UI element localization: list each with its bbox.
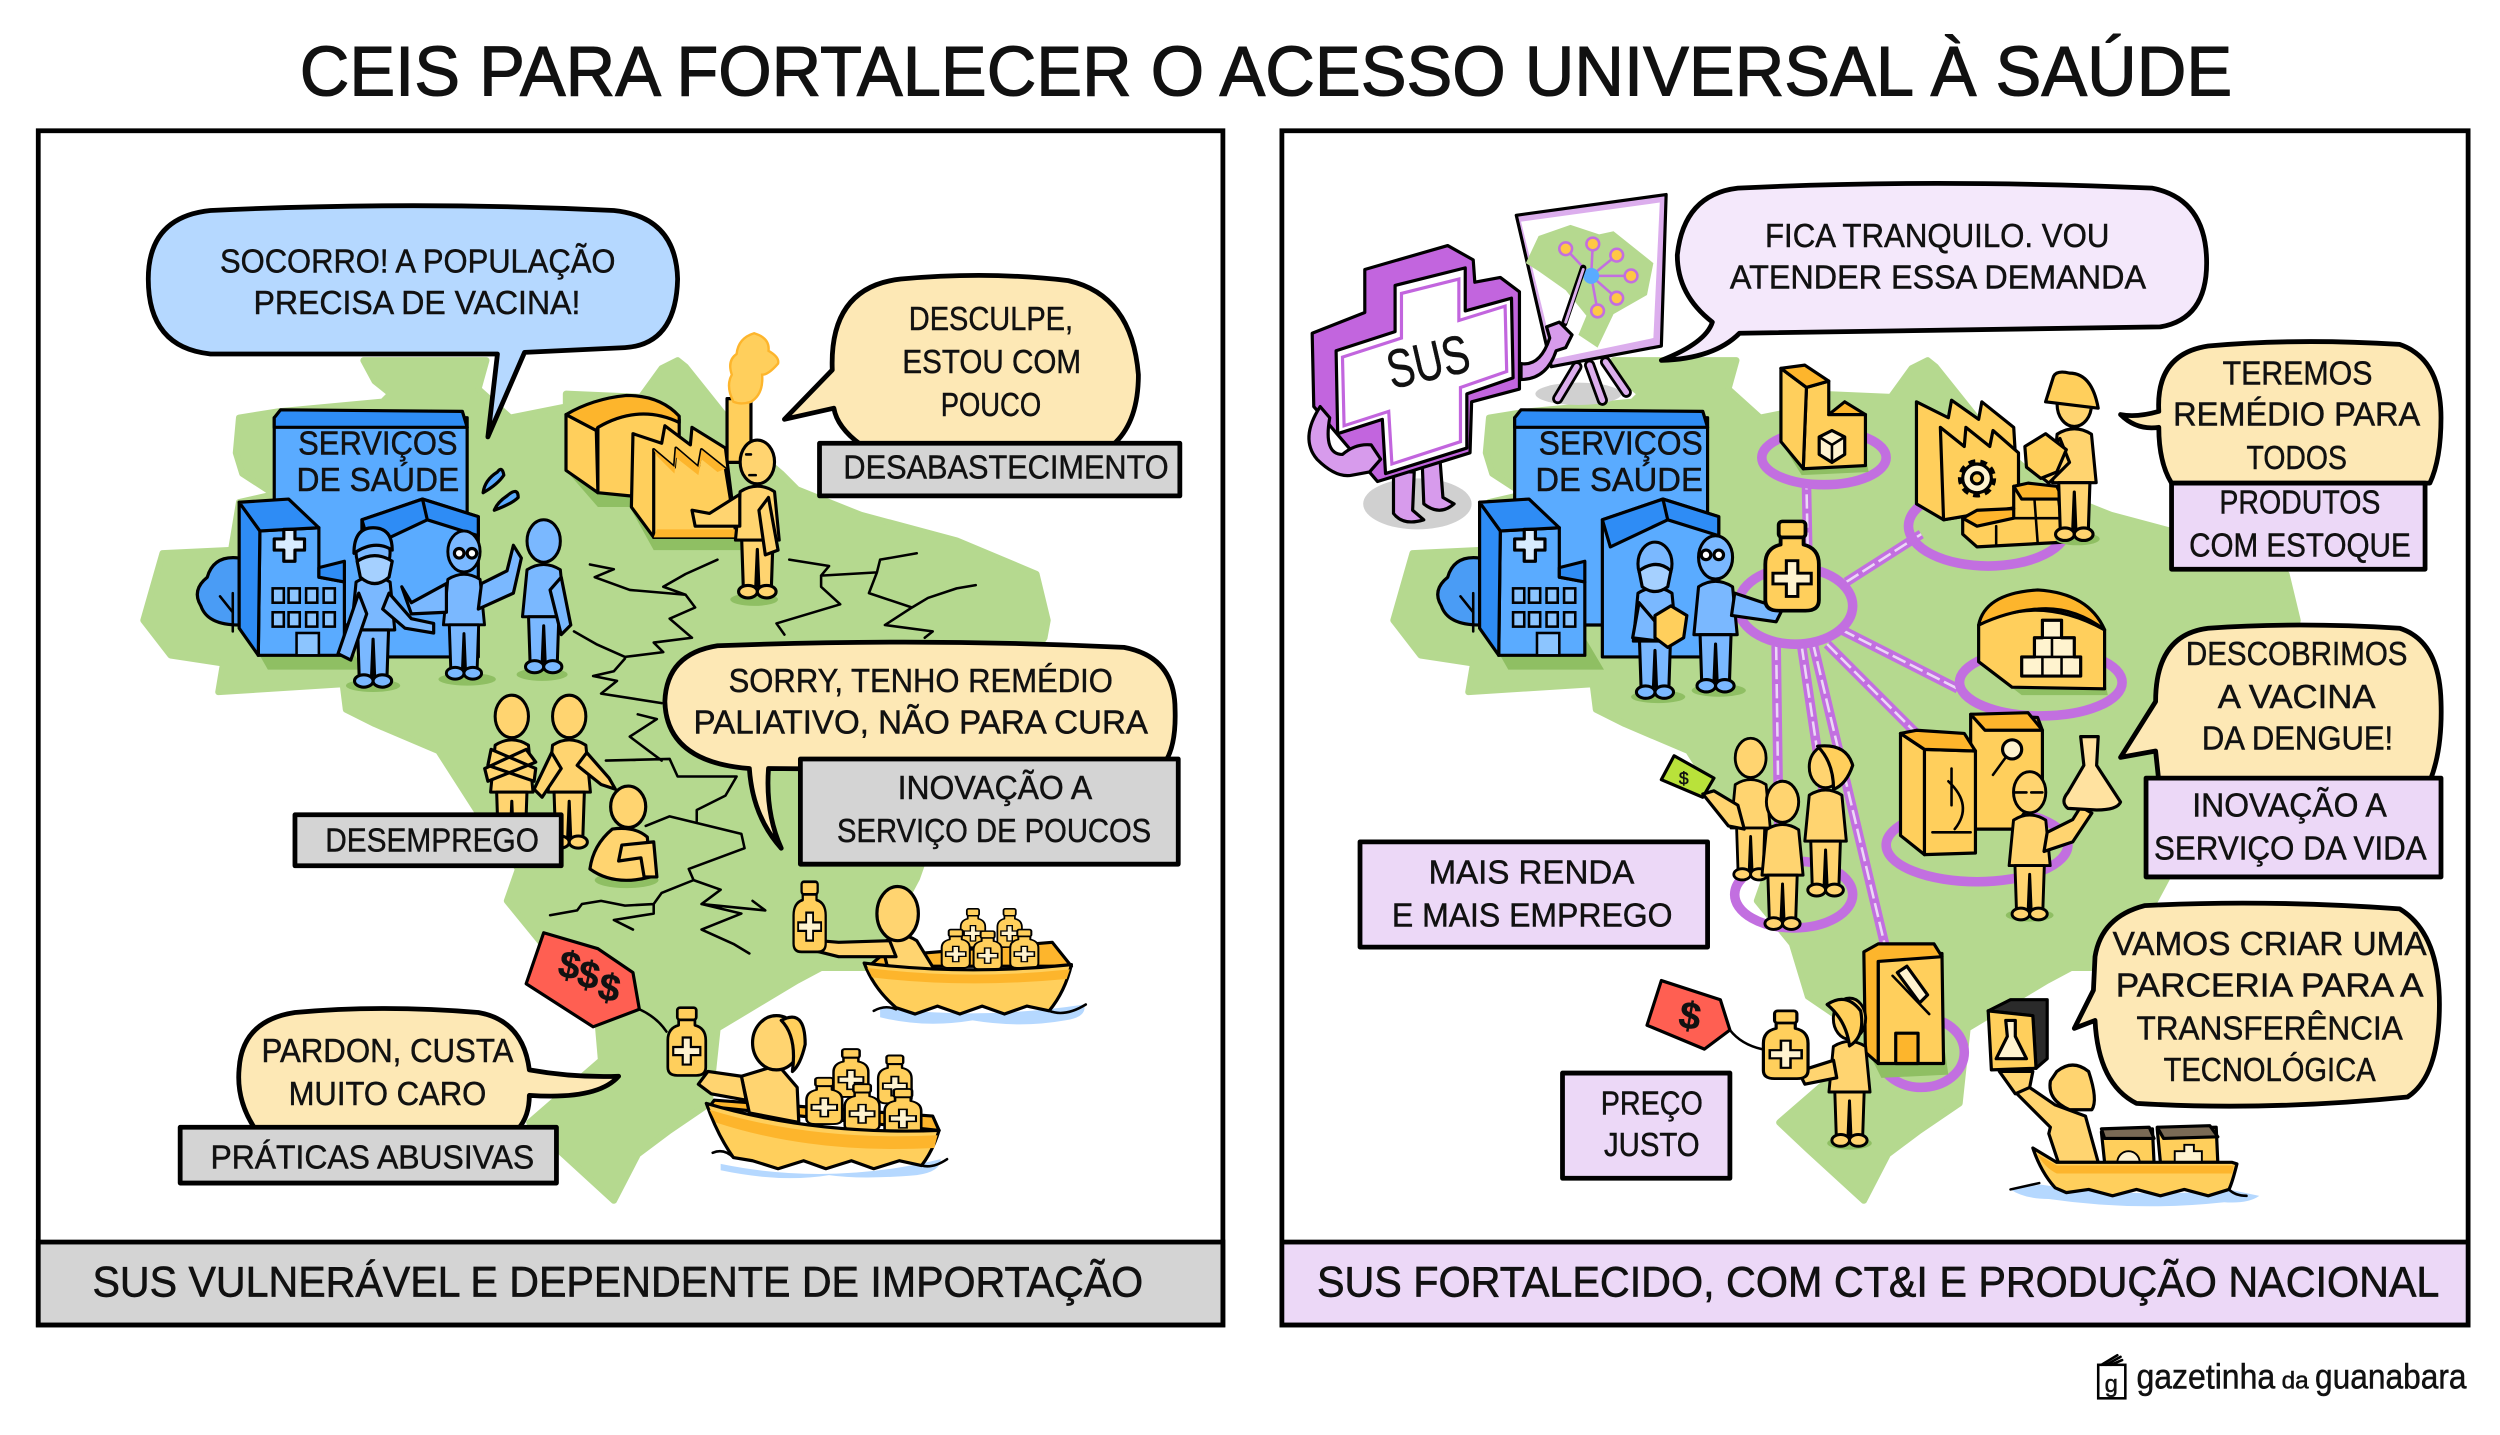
person: masked health worker with box — [1631, 542, 1687, 703]
label: mais renda e mais emprego — [1360, 842, 1708, 947]
speech bubble: vamos criar: PARCERIA PARA A — [2116, 968, 2424, 1005]
label: práticas abusivas — [180, 1127, 556, 1183]
speech bubble: descobrimos — [2121, 625, 2441, 781]
logo: gazetinha da guanabara: guanabara — [2315, 1358, 2467, 1397]
label: inovação a serviço da vida — [2146, 778, 2441, 877]
boat with bottles and exporter — [794, 882, 1086, 1024]
person group: unemployed — [485, 695, 658, 888]
panel: SUS vulnerável — [38, 131, 1223, 1325]
label: inovação a serviço de poucos: SERVIÇO DE POUCOS — [837, 813, 1151, 850]
boat with bottles and businessman — [668, 1008, 947, 1178]
map of Brazil — [1393, 360, 2298, 1201]
speech bubble: desculpe: ESTOU COM — [902, 344, 1081, 381]
person: doctor handing bottle — [1692, 536, 1783, 697]
speech bubble: pardon: PARDON, CUSTA — [261, 1033, 514, 1070]
boat with technology transfer — [1988, 1000, 2259, 1206]
icon: hospital buildings — [197, 410, 478, 670]
icon: vaccine factory — [1864, 944, 1948, 1078]
speech bubble: vamos criar: TECNOLÓGICA — [2164, 1051, 2376, 1089]
person: doctor with glasses — [402, 531, 521, 686]
label: inovação a serviço da vida: INOVAÇÃO A — [2192, 786, 2387, 824]
character: SUS cross with easel — [1309, 195, 1666, 529]
icon: large bottle — [1765, 521, 1819, 611]
speech bubble: descobrimos: DA DENGUE! — [2202, 720, 2393, 757]
icon: factory with smoke — [566, 333, 778, 550]
price tag $$$: $ — [594, 965, 624, 1011]
icon: research lab with microscope — [1901, 713, 2042, 855]
icon: storage dome with boxes — [1979, 590, 2108, 695]
icon: sweat drops — [483, 469, 518, 510]
logo: gazetinha da guanabara — [2098, 1355, 2467, 1398]
speech bubble: vamos criar — [2074, 903, 2439, 1106]
label: inovação a serviço da vida: SERVIÇO DA VIDA — [2154, 830, 2427, 867]
speech bubble: vamos criar: VAMOS CRIAR UMA — [2113, 926, 2427, 963]
speech bubble: fica tranquilo — [1661, 183, 2207, 360]
label: práticas abusivas: PRÁTICAS ABUSIVAS — [210, 1140, 534, 1177]
price tag $$$: $ — [555, 943, 584, 989]
icon: hospital buildings: SERVIÇOS — [1539, 425, 1703, 462]
icon: hospital buildings: DE SAÚDE — [1535, 461, 1703, 499]
icon: factory with gear and boxes — [1916, 400, 2065, 547]
caption bar: left: SUS VULNERÁVEL E DEPENDENTE DE IMPORTAÇÃO — [92, 1258, 1143, 1306]
person: health worker with bottle and price tag — [1798, 998, 1872, 1150]
caption bar: right — [1282, 1242, 2468, 1325]
logo: gazetinha da guanabara: da — [2282, 1368, 2309, 1395]
icon: L-shaped warehouse — [1781, 365, 1869, 475]
speech bubble: teremos — [2121, 342, 2441, 483]
speech bubble: socorro: PRECISA DE VACINA! — [254, 285, 580, 322]
person: worker with hard hat — [2025, 372, 2100, 545]
speech bubble: socorro — [148, 206, 678, 437]
person: man from behind — [517, 520, 571, 681]
speech bubble: sorry: SORRY, TENHO REMÉDIO — [729, 663, 1113, 700]
title: CEIS PARA FORTALECER O ACESSO UNIVERSAL À SAÚDE — [300, 32, 2232, 111]
panel: SUS fortalecido — [1282, 131, 2468, 1325]
caption bar: left — [38, 1242, 1223, 1325]
label: inovação a serviço de poucos — [800, 759, 1178, 864]
label: produtos com estoque — [2172, 483, 2425, 569]
label: preço justo — [1562, 1073, 1730, 1178]
label: preço justo: JUSTO — [1604, 1127, 1700, 1164]
speech bubble: descobrimos: A VACINA — [2218, 679, 2376, 716]
speech bubble: pardon: MUITO CARO — [289, 1076, 486, 1113]
label: produtos com estoque: PRODUTOS — [2219, 484, 2380, 521]
logo: gazetinha da guanabara: g — [2105, 1371, 2118, 1398]
icon: bottle with tag — [1647, 981, 1808, 1079]
speech bubble: desculpe — [784, 275, 1138, 445]
price tag $$$: $ — [574, 952, 603, 999]
speech bubble: desculpe: POUCO — [941, 387, 1041, 424]
label: desabastecimento — [820, 443, 1180, 496]
speech bubble: sorry: PALIATIVO, NÃO PARA CURA — [694, 703, 1149, 741]
label: inovação a serviço de poucos: INOVAÇÃO A — [898, 769, 1093, 807]
network of links and rings — [1735, 431, 2122, 1087]
label: mais renda e mais emprego: MAIS RENDA — [1429, 854, 1635, 891]
person: scientist with flask — [2006, 737, 2121, 922]
speech bubble: descobrimos: DESCOBRIMOS — [2186, 636, 2408, 673]
person: masked health worker — [338, 528, 434, 692]
speech bubble: teremos: REMÉDIO PARA — [2173, 397, 2421, 434]
speech bubble: fica tranquilo: FICA TRANQUILO. VOU — [1765, 218, 2109, 255]
icon: hospital buildings: DE SAÚDE — [297, 461, 459, 499]
speech bubble: socorro: SOCORRO! A POPULAÇÃO — [220, 243, 615, 281]
caption bar: right: SUS FORTALECIDO, COM CT&I E PRODUÇÃO NACIONAL — [1317, 1258, 2439, 1306]
speech bubble: sorry — [665, 642, 1175, 848]
speech bubble: fica tranquilo: ATENDER ESSA DEMANDA — [1730, 260, 2147, 297]
person group: workers with money: $ — [1679, 768, 1689, 788]
speech bubble: teremos: TODOS — [2246, 440, 2347, 477]
speech bubble: teremos: TEREMOS — [2223, 355, 2372, 392]
icon: hospital buildings — [1438, 410, 1719, 670]
label: desemprego: DESEMPREGO — [325, 822, 539, 859]
speech bubble: vamos criar: TRANSFERÊNCIA — [2136, 1011, 2403, 1048]
person: factory manager — [692, 440, 779, 606]
speech bubble: pardon — [239, 1008, 619, 1129]
price tag $$$ — [526, 933, 666, 1032]
label: mais renda e mais emprego: E MAIS EMPREGO — [1392, 897, 1673, 934]
person group: workers with money — [1661, 738, 1853, 929]
label: preço justo: PREÇO — [1601, 1086, 1703, 1123]
speech bubble: desculpe: DESCULPE, — [909, 301, 1073, 338]
label: desabastecimento: DESABASTECIMENTO — [843, 449, 1169, 486]
label: desemprego — [295, 815, 561, 866]
label: produtos com estoque: COM ESTOQUE — [2189, 527, 2411, 564]
logo: gazetinha da guanabara: gazetinha — [2136, 1358, 2276, 1397]
icon: hospital buildings: SERVIÇOS — [298, 425, 458, 462]
icon: bottle with tag: $ — [1676, 993, 1704, 1039]
map of Brazil with cracks — [143, 360, 1048, 1201]
character: SUS cross with easel: SUS — [1381, 324, 1475, 401]
